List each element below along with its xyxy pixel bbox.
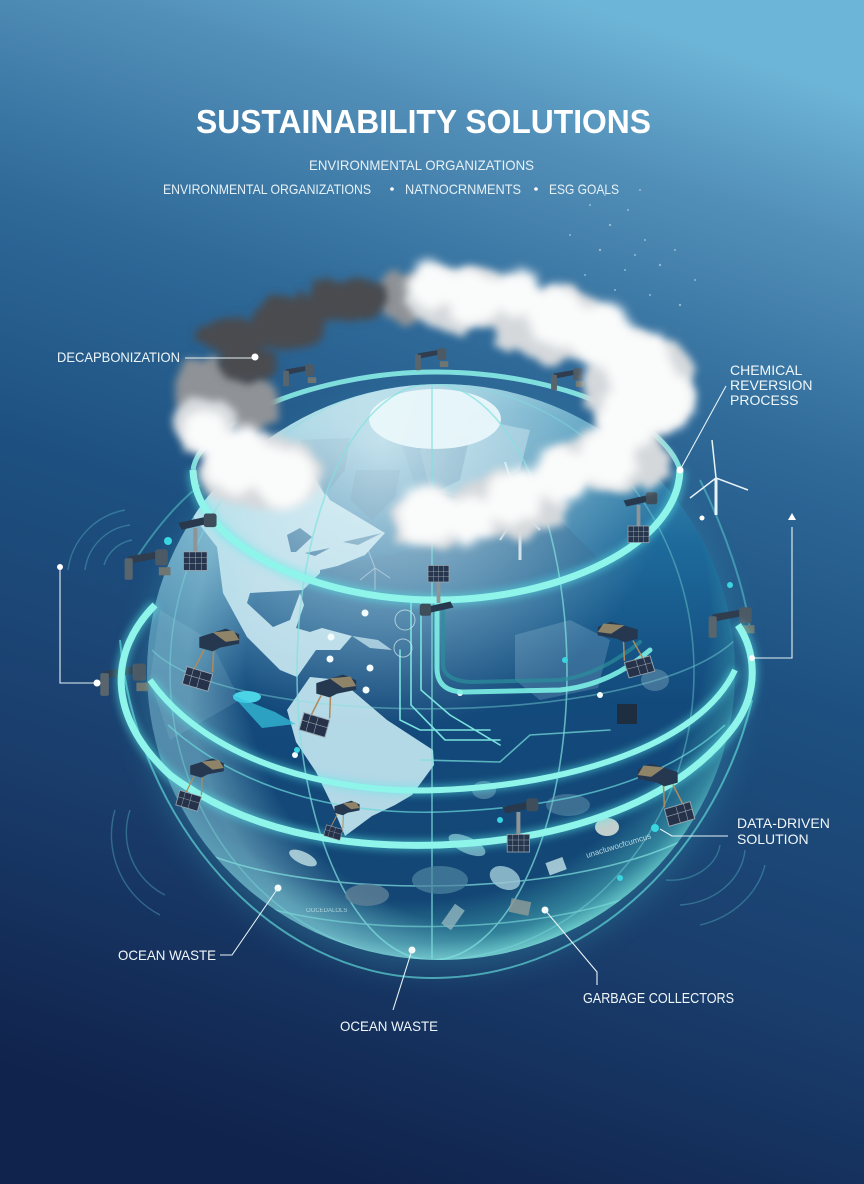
turbine small bbox=[360, 550, 390, 590]
micro label: OOCEDALOLS bbox=[306, 908, 347, 914]
globe bbox=[120, 384, 752, 978]
polar cap bbox=[369, 389, 501, 449]
globe outer glow bbox=[143, 400, 739, 970]
subtitle: ENVIRONMENTAL ORGANIZATIONS bbox=[309, 157, 534, 173]
rim light bbox=[147, 384, 735, 960]
label: ocean waste left: OCEAN WASTE bbox=[118, 947, 216, 963]
wind turbines bbox=[360, 440, 748, 590]
label: data-driven solution bbox=[737, 815, 830, 847]
dark smoke bbox=[196, 274, 392, 383]
robots on rings bbox=[176, 492, 695, 852]
label: chemical reversion process: REVERSION bbox=[730, 377, 812, 393]
label: chemical reversion process: PROCESS bbox=[730, 392, 798, 408]
lakes and dark land detail bbox=[287, 438, 593, 573]
callout lines bbox=[60, 358, 792, 1010]
turbine right bbox=[690, 440, 748, 515]
callout dots bbox=[57, 354, 755, 686]
audience line: ENVIRONMENTAL ORGANIZATIONS bbox=[163, 181, 371, 197]
label: chemical reversion process bbox=[730, 362, 812, 408]
top ring bbox=[193, 470, 680, 600]
white puffs bbox=[183, 261, 694, 545]
ring back portions bbox=[193, 372, 680, 470]
main circuit bbox=[437, 600, 650, 692]
upper haze bbox=[147, 384, 735, 960]
continents bbox=[150, 420, 610, 836]
rings bbox=[121, 470, 752, 845]
particle spray bbox=[569, 189, 696, 306]
grid lines bbox=[152, 384, 735, 960]
globe sphere bbox=[147, 384, 735, 960]
middle ring bbox=[150, 670, 735, 791]
left rim light bbox=[147, 384, 735, 960]
outer thin orbit bbox=[120, 480, 752, 978]
debris in ocean bbox=[232, 669, 669, 930]
audience line bbox=[163, 181, 619, 197]
gray smoke bbox=[174, 272, 433, 435]
lower ring bbox=[121, 605, 752, 845]
turbine center bbox=[500, 462, 540, 560]
label: chemical reversion process: CHEMICAL bbox=[730, 362, 803, 378]
title: SUSTAINABILITY SOLUTIONS bbox=[196, 103, 651, 140]
glowing nodes bbox=[164, 537, 733, 954]
icon: up arrow bbox=[788, 513, 796, 520]
circuit traces bbox=[394, 600, 650, 762]
smoke clouds bbox=[173, 261, 696, 548]
label: data-driven solution: DATA-DRIVEN bbox=[737, 815, 830, 831]
label: decarbonization: DECAPBONIZATION bbox=[57, 349, 180, 365]
robots behind rings bbox=[100, 348, 755, 696]
signal waves bbox=[68, 510, 765, 925]
cloud body bbox=[173, 268, 696, 548]
ring glows bbox=[121, 470, 752, 845]
audience line: NATNOCRNMENTS bbox=[405, 181, 521, 197]
label: ocean waste bottom: OCEAN WASTE bbox=[340, 1018, 438, 1034]
audience line: ESG GOALS bbox=[549, 181, 619, 197]
label: data-driven solution: SOLUTION bbox=[737, 831, 809, 847]
micro label curved: unacluwocfcumcus bbox=[585, 832, 652, 860]
label: garbage collectors: GARBAGE COLLECTORS bbox=[583, 990, 734, 1007]
